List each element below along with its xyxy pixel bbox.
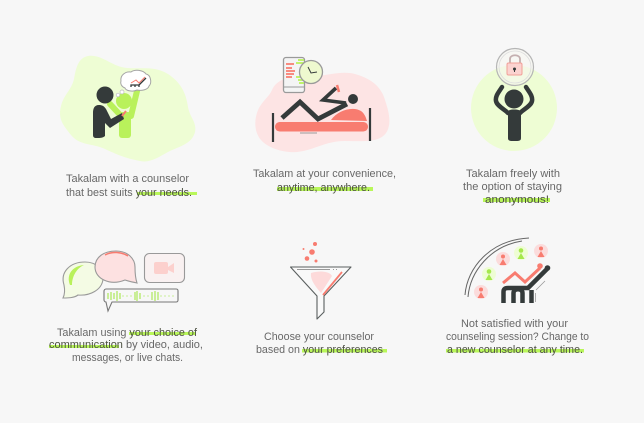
- icon: dark person: [93, 86, 126, 138]
- text: caption 5: Choose your counselor: [264, 331, 374, 343]
- background circle: [471, 65, 557, 151]
- text: caption 4: messages, or live chats.: [72, 352, 183, 364]
- text: caption 2: [253, 168, 396, 194]
- text: caption 2: anytime, anywhere.: [277, 182, 370, 194]
- icon: funnel: [290, 267, 351, 319]
- icon: counselor avatars: [474, 244, 548, 299]
- text: caption 5: [256, 331, 387, 356]
- text: caption 3: [463, 168, 562, 206]
- icon: audio message: [104, 289, 178, 311]
- text: caption 4: communication by video, audio,: [49, 339, 203, 351]
- text: caption 3: the option of staying: [463, 181, 562, 193]
- background blob: [255, 73, 389, 152]
- text: caption 3: Takalam freely with: [466, 168, 560, 180]
- panel: preferences: [256, 242, 387, 356]
- icon: bubbles: [302, 242, 318, 262]
- text: caption 6: Not satisfied with your: [461, 318, 568, 330]
- text: caption 2: Takalam at your convenience,: [253, 168, 396, 180]
- background blob: [60, 56, 195, 161]
- icon: pink chat bubble: [95, 251, 137, 283]
- icon: reclining person: [282, 85, 358, 119]
- icon: thought bubble: [116, 70, 151, 97]
- icon: green person: [110, 91, 137, 138]
- text: caption 4: Takalam using your choice of: [57, 327, 198, 339]
- text: caption 6: counseling session? Change to: [446, 331, 589, 343]
- text: caption 1: Takalam with a counselor: [66, 173, 189, 185]
- text: caption 6: a new counselor at any time.: [447, 344, 583, 356]
- icon: video tile: [144, 254, 184, 282]
- arcs: [465, 238, 529, 297]
- text: caption 4: [49, 327, 203, 364]
- text: caption 6: [446, 318, 589, 356]
- text: caption 5: based on your preferences: [256, 344, 383, 356]
- panel: change counselor: [446, 238, 589, 356]
- icon: lock badge: [496, 48, 534, 86]
- panel: matching counselor: [60, 56, 197, 199]
- panel: communication choice: [49, 251, 203, 364]
- text: caption 1: that best suits your needs.: [66, 187, 192, 199]
- icon: bed: [273, 108, 370, 142]
- icon: clock: [300, 60, 322, 84]
- icon: person arms raised: [496, 87, 532, 141]
- text: caption 1: [66, 173, 197, 199]
- text: caption 3: anonymous!: [485, 194, 549, 206]
- icon: green chat bubble: [63, 262, 103, 298]
- panel: anonymity: [463, 48, 562, 206]
- icon: logo chart: [503, 263, 550, 303]
- panel: convenience: [253, 58, 396, 194]
- icon: phone: [284, 58, 304, 92]
